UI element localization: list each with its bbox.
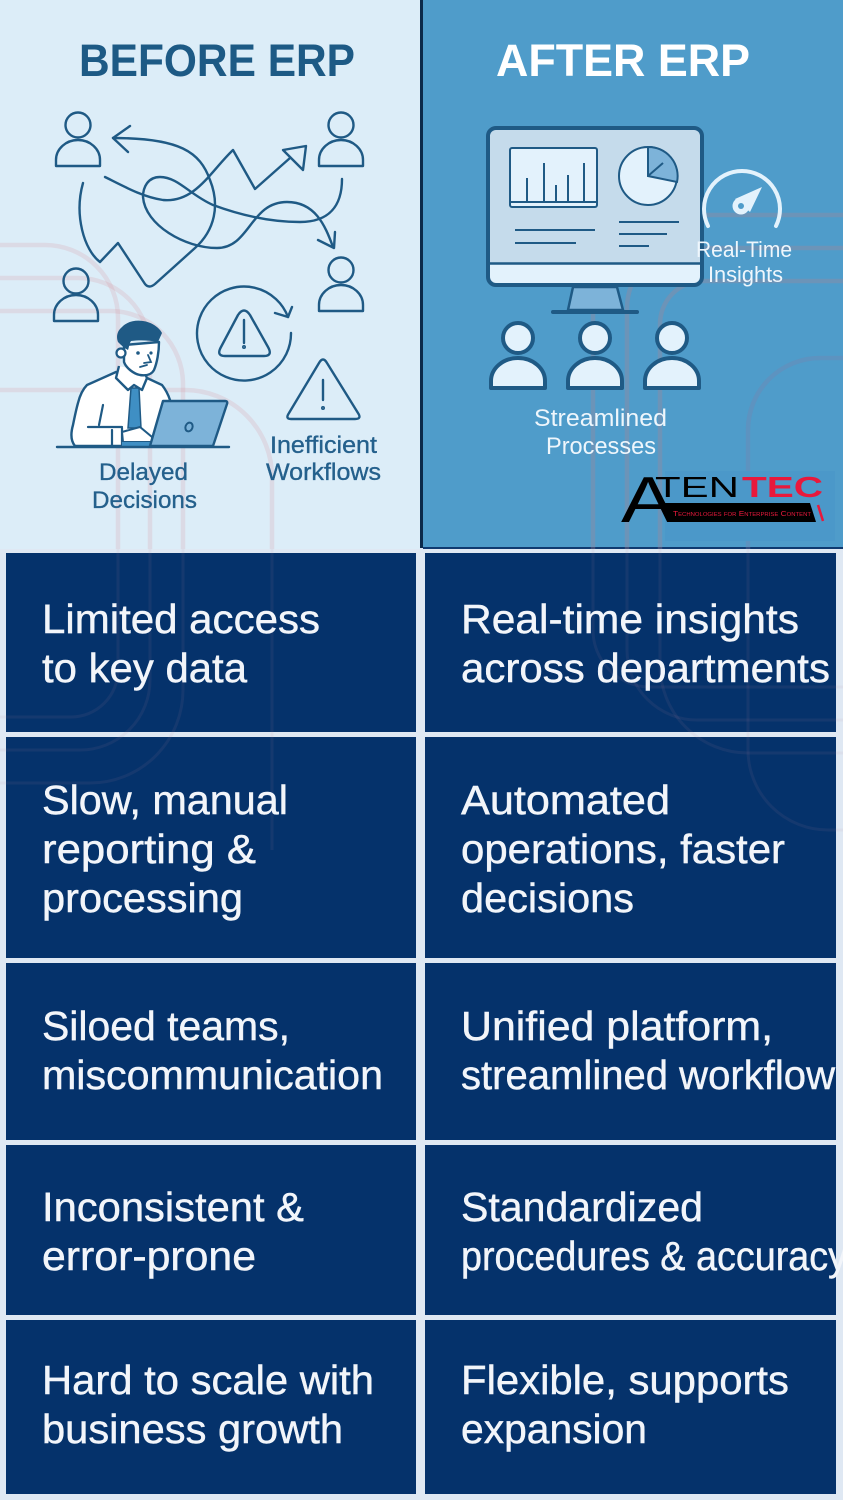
- label: delayed decisions: Delayed: [99, 459, 188, 486]
- icon: person left: [54, 268, 98, 321]
- label: streamlined processes: Processes: [546, 433, 656, 460]
- row 4 left cell: [6, 1145, 416, 1315]
- text: left column, slow manual: reporting &: [42, 826, 256, 872]
- table: comparison grid: [6, 553, 836, 1494]
- logo: Atentec: [621, 463, 835, 541]
- text: left column, inconsistent: Inconsistent &: [42, 1184, 304, 1230]
- text: left column, limited access: to key data: [42, 645, 247, 691]
- icon: gauge: [704, 171, 780, 226]
- icon: team of three people: [491, 323, 699, 388]
- label: streamlined processes: [534, 405, 667, 460]
- row 3 right cell: [425, 963, 836, 1140]
- text: right column, automated: decisions: [461, 875, 634, 921]
- panel: after ERP background: [423, 0, 843, 547]
- text: left column, limited access: Limited access: [42, 596, 320, 642]
- text: left column, siloed teams: Siloed teams,: [42, 1003, 290, 1049]
- label: real-time insights: Real-Time: [696, 237, 792, 262]
- row 5 left cell: [6, 1320, 416, 1494]
- panel: before ERP background: [0, 0, 420, 550]
- text: left column, slow manual: [42, 777, 288, 921]
- text: right column, real-time insights: Real-time insights: [461, 596, 799, 642]
- text: left column, hard to scale: [42, 1357, 374, 1452]
- logo: Atentec: Technologies for Enterprise Content: [673, 511, 811, 518]
- text: left column, siloed teams: miscommunication: [42, 1052, 383, 1098]
- label: real-time insights: [696, 237, 792, 287]
- text: right column, unified platform: Unified platform,: [461, 1003, 773, 1049]
- text: right column, standardized: [461, 1184, 843, 1279]
- label: inefficient workflows: Workflows: [266, 459, 381, 486]
- text: right column, flexible: [461, 1357, 789, 1452]
- center divider: [420, 0, 423, 548]
- row 2 left cell: [6, 737, 416, 958]
- icon: warning triangle: [287, 360, 359, 419]
- text: left column, siloed teams: [42, 1003, 383, 1098]
- row 2 right cell: [425, 737, 836, 958]
- text: right column, real-time insights: across departments: [461, 645, 830, 691]
- text: right column, unified platform: streamlined workflow: [461, 1052, 835, 1098]
- text: right column, standardized: Standardized: [461, 1184, 703, 1230]
- heading: before ERP: BEFORE ERP: [79, 35, 355, 86]
- text: right column, unified platform: [461, 1003, 835, 1098]
- text: right column, automated: [461, 777, 785, 921]
- row 5 right cell: [425, 1320, 836, 1494]
- label: inefficient workflows: [266, 432, 381, 486]
- label: real-time insights: Insights: [708, 262, 783, 287]
- logo: Atentec: TEC: [742, 472, 823, 504]
- text: left column, limited access: [42, 596, 320, 691]
- text: right column, flexible: expansion: [461, 1406, 647, 1452]
- text: left column, slow manual: processing: [42, 875, 243, 921]
- row 4 right cell: [425, 1145, 836, 1315]
- icon: person right: [319, 258, 363, 311]
- icon: person top-left: [56, 112, 100, 166]
- logo: Atentec: TEN: [655, 472, 739, 504]
- icon: monitor dashboard: [488, 128, 702, 312]
- text: right column, automated: Automated: [461, 777, 670, 823]
- text: left column, inconsistent: error-prone: [42, 1233, 256, 1279]
- text: left column, slow manual: Slow, manual: [42, 777, 288, 823]
- row 1 right cell: [425, 553, 836, 732]
- text: right column, automated: operations, faster: [461, 826, 785, 872]
- icon: warning in circular arrow: [197, 287, 292, 381]
- icon: tangled workflow arrows: [80, 126, 342, 286]
- text: left column, hard to scale: business growth: [42, 1406, 343, 1452]
- label: inefficient workflows: Inefficient: [270, 432, 377, 459]
- logo: Atentec: A: [621, 463, 676, 536]
- text: right column, flexible: Flexible, supports: [461, 1357, 789, 1403]
- row 3 left cell: [6, 963, 416, 1140]
- text: right column, real-time insights: [461, 596, 830, 691]
- label: streamlined processes: Streamlined: [534, 405, 667, 432]
- heading: after ERP: AFTER ERP: [496, 35, 750, 86]
- label: delayed decisions: Decisions: [92, 487, 197, 514]
- illustration: man at laptop: [57, 321, 229, 447]
- icon: person top-right: [319, 112, 363, 166]
- label: delayed decisions: [92, 459, 197, 514]
- row 1 left cell: [6, 553, 416, 732]
- text: left column, hard to scale: Hard to scale with: [42, 1357, 374, 1403]
- text: left column, inconsistent: [42, 1184, 304, 1279]
